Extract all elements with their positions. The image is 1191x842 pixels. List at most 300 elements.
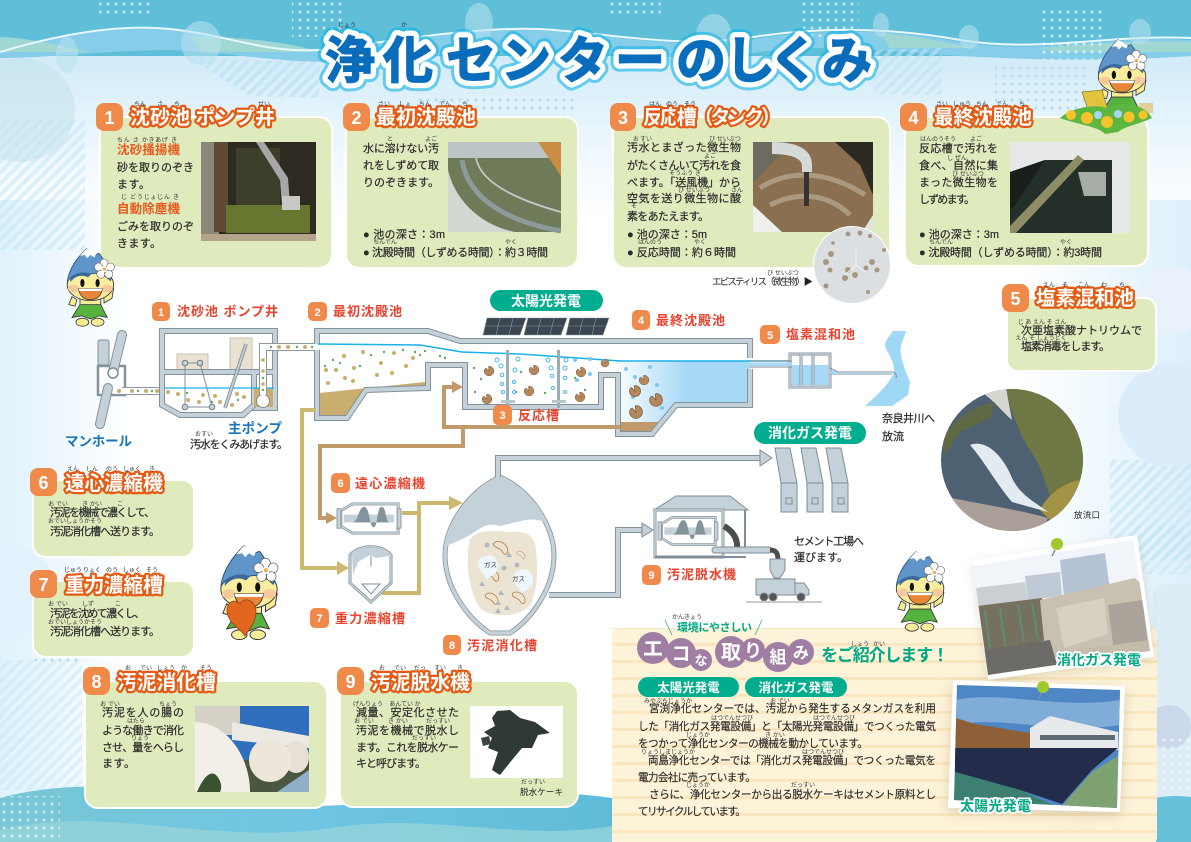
text: digester description: お でい xyxy=(100,701,120,708)
heading: eco circles: り xyxy=(744,641,762,661)
baffles xyxy=(501,350,566,408)
text: eco body copy: さらに、浄化センターから出る脱水ケーキはセメント原料とし xyxy=(649,788,936,801)
gravity thickener xyxy=(350,547,391,602)
caption: cake xyxy=(520,779,563,797)
text: chlorine description: 塩素消毒をします。 xyxy=(1021,339,1110,353)
text: reaction tank description: び せいぶつ xyxy=(709,135,741,143)
heading 2: 最初沈殿池 xyxy=(376,106,476,129)
text: first settling description: やく xyxy=(505,238,517,246)
gas bubble labels: ガス xyxy=(484,560,497,569)
solar label: 太陽光発電 xyxy=(511,293,581,309)
photo: reaction tank xyxy=(753,142,873,232)
mascot: watering flowers xyxy=(1098,40,1147,119)
sediment particles xyxy=(324,349,586,394)
text: eco body copy: き かい xyxy=(765,732,785,739)
heading: introduction text: しょう xyxy=(851,641,869,648)
panel 4: final settling tank xyxy=(900,101,1148,266)
heading 3: 反応槽（タンク） xyxy=(643,106,781,129)
water surface line xyxy=(318,344,790,361)
text: dewatering description: お でい xyxy=(354,718,374,725)
final settling sludge xyxy=(620,422,659,432)
text: final settling description: やく xyxy=(1060,238,1072,246)
panel 9: sludge dewatering: すい xyxy=(434,665,446,672)
text: eco body copy: をつかって浄化センターの機械を動かしています。 xyxy=(638,737,868,750)
label 7: 重力濃縮槽 xyxy=(335,611,405,626)
panel 7: gravity thickener: そう xyxy=(146,567,158,574)
badge 8 xyxy=(83,667,110,695)
heading 9: 汚泥脱水機 xyxy=(371,671,470,694)
panel 3: reaction tank: そう xyxy=(684,101,696,108)
text: grit scraper: 自動除塵機 xyxy=(117,201,180,216)
text: final settling description: はんのうそう xyxy=(920,136,956,143)
chlorine tank xyxy=(750,354,896,387)
text: centrifuge description: おでいしょうかそう xyxy=(48,518,102,525)
text: reaction tank description: そ xyxy=(631,203,637,210)
text: first settling description: ● 沈殿時間（しずめる時間）：約３時間 xyxy=(363,245,548,259)
arrow heads: brown xyxy=(326,381,463,524)
text: final settling description: び せいぶつ xyxy=(952,170,984,178)
panel 2: first settling tank: でん xyxy=(439,101,451,108)
text: reaction tank description: さん xyxy=(731,187,743,194)
text: centrifuge description: 汚泥を機械で濃くして、 xyxy=(50,505,155,519)
text: gravity description: しず xyxy=(82,600,94,608)
text: grit scraper: 砂を取りのぞき xyxy=(117,161,194,174)
panel 6: centrifugal thickener: しゅく xyxy=(123,466,141,473)
caption: solar: 太陽光発電 xyxy=(960,798,1031,814)
text: eco body copy: 電力会社に売っています。 xyxy=(638,771,756,784)
text: grit scraper: きます。 xyxy=(117,237,161,250)
label: main pump: 主ポンプ xyxy=(228,420,282,436)
panel 4: final settling tank: さい xyxy=(936,101,948,108)
text: eco body copy: した「消化ガス発電設備」と「太陽光発電設備」でつくった電気 xyxy=(638,720,936,733)
text: centrifuge description: き かい xyxy=(82,501,102,508)
text: first settling description: 水に溶けない汚 xyxy=(363,142,439,155)
text: centrifuge description xyxy=(48,501,160,538)
label 4: 4 xyxy=(638,315,645,327)
pill: solar power xyxy=(638,677,739,697)
pill: digestion gas power: 消化ガス発電 xyxy=(758,680,834,695)
air bubbles xyxy=(495,357,568,394)
caption: epistylis: エピスティリス（微生物）▶ xyxy=(712,276,813,288)
photo: dewatered cake xyxy=(470,706,563,778)
text: dewatering description: キと呼びます。 xyxy=(356,757,426,770)
text: gravity description: おでいしょうかそう xyxy=(48,619,102,626)
panel: eco initiatives xyxy=(612,614,1157,842)
mascot: left top xyxy=(67,249,114,326)
text: eco body copy: お でい xyxy=(770,698,790,705)
photo: final settling tank xyxy=(1010,142,1130,233)
badge 5 xyxy=(1002,284,1029,312)
panel 4: final settling tank: ちん xyxy=(976,101,988,108)
text: digester description: させ、量をへらし xyxy=(102,741,184,754)
panel 3: reaction tank: はん xyxy=(649,101,661,108)
label: main pump xyxy=(190,420,288,451)
panel 8: sludge digester: か xyxy=(181,665,187,672)
panel 3: reaction tank xyxy=(610,101,890,268)
text: chlorine description: 次亜塩素酸ナトリウムで xyxy=(1021,323,1142,337)
title: じょう xyxy=(338,22,356,29)
label 7: 7 xyxy=(316,613,323,625)
blue droplets xyxy=(573,357,664,410)
badge 4 xyxy=(900,103,927,131)
text: reaction tank description: べます。「送風機」から xyxy=(627,175,741,189)
caption: digestion gas: 消化ガス発電 xyxy=(1057,652,1141,668)
text: final settling description: しずめます。 xyxy=(919,193,975,206)
badge 5: 5 xyxy=(1010,289,1021,309)
label 2: 最初沈殿池 xyxy=(333,304,402,319)
panel 1: grit chamber and pump well: せい xyxy=(258,101,270,108)
subtitle: eco friendly xyxy=(665,614,762,635)
text: digester description: はたら xyxy=(127,718,145,725)
mascot: holding heart xyxy=(221,546,278,640)
pin: gas photo xyxy=(1051,538,1063,556)
panel 8: sludge digester xyxy=(83,665,327,808)
badge 9: 9 xyxy=(345,672,356,692)
label: manhole: マンホール xyxy=(65,434,132,449)
text: eco body copy: じょうか xyxy=(686,732,710,739)
text: centrifuge description: こ xyxy=(117,501,123,508)
heading: eco circles: 取 xyxy=(721,642,741,664)
text: dewatering description: ます。これを脱水ケー xyxy=(356,740,459,754)
panel 7: gravity thickener xyxy=(30,567,194,657)
caption: cake: だっすい xyxy=(521,779,545,786)
text: eco body copy: 宮渕浄化センターでは、汚泥から発生するメタンガスを利用 xyxy=(649,702,936,715)
panel 5: chlorine mixing tank: えん xyxy=(1043,282,1055,289)
text: final settling description: まった微生物を xyxy=(919,175,998,189)
cement factory label xyxy=(794,535,864,564)
pill: digestion gas power xyxy=(745,677,847,697)
panel 9: sludge dewatering: き xyxy=(457,665,463,672)
cement factory label: セメント工場へ xyxy=(794,535,864,548)
label 9: 汚泥脱水機 xyxy=(667,567,736,582)
panel 4: final settling tank: でん xyxy=(996,101,1008,108)
text: gravity description xyxy=(48,600,160,638)
gas generators xyxy=(775,448,848,512)
text: digester description: 汚泥を人の腸の xyxy=(102,706,184,719)
label 5 xyxy=(760,325,855,344)
text: grit scraper: 沈砂掻揚機 xyxy=(117,142,180,157)
final tank water xyxy=(612,361,750,425)
mascot: right xyxy=(896,552,945,631)
text: reaction tank description: よご xyxy=(704,152,716,160)
badge 7: 7 xyxy=(38,575,49,595)
badge 7 xyxy=(30,570,57,598)
photo: first settling tank xyxy=(448,142,561,232)
diagram labels xyxy=(152,302,855,655)
photo: digester tanks xyxy=(195,706,309,792)
text: reaction tank description: 素をあたえます。 xyxy=(627,210,709,223)
first settling sludge xyxy=(319,382,425,416)
text: gravity description: 汚泥を沈めて濃くし、 xyxy=(50,606,145,620)
label 6 xyxy=(331,473,425,493)
badge 1: 1 xyxy=(104,108,115,128)
text: digester description: りょう xyxy=(131,735,149,742)
gas power label xyxy=(754,422,866,444)
dewatering machine xyxy=(654,496,778,560)
text: reaction tank description: そうふう き xyxy=(669,170,701,177)
text: eco body copy: だっすい xyxy=(791,782,815,789)
heading: eco circles xyxy=(637,632,814,672)
text: final settling description: し ぜん xyxy=(947,155,967,162)
text: gravity description: こ xyxy=(115,601,121,608)
text: final settling description: ● 沈殿時間（しずめる時間）：約3時間 xyxy=(919,245,1102,259)
photo: microscope view xyxy=(813,226,890,303)
text: reaction tank description: お xyxy=(633,136,639,143)
text: eco body copy: みやぶちじょうか xyxy=(644,697,692,705)
badge 6: 6 xyxy=(38,473,49,493)
text: digester description: ます。 xyxy=(102,757,135,770)
panel 6: centrifugal thickener: しん xyxy=(86,466,98,473)
inlet pipe xyxy=(116,389,170,393)
label 6: 遠心濃縮機 xyxy=(355,476,425,491)
text: final settling description: ● 池の深さ：3m xyxy=(919,228,999,241)
text: chlorine description: えん そ しょうどく xyxy=(1015,334,1067,342)
heading 8: 汚泥消化槽 xyxy=(117,671,216,694)
text: first settling description: りのぞきます。 xyxy=(363,176,439,189)
label: main pump: おすい xyxy=(195,431,213,438)
text: reaction tank description: やく xyxy=(694,238,706,246)
panel 3: reaction tank: のう xyxy=(666,101,678,108)
heading 6: 遠心濃縮機 xyxy=(65,472,163,495)
text: first settling description: と xyxy=(387,136,393,143)
label 1 xyxy=(152,302,278,321)
heading 5: 塩素混和池 xyxy=(1036,287,1134,310)
heading: introduction text: かい xyxy=(873,641,885,648)
text: eco body copy xyxy=(638,697,936,818)
text: reaction tank description: ● 池の深さ：5m xyxy=(627,228,707,241)
panel 1: grit chamber and pump well xyxy=(96,101,332,268)
panel 7: gravity thickener: しゅく xyxy=(123,567,141,574)
title: か xyxy=(401,22,407,29)
microbes xyxy=(482,359,662,418)
badge 9 xyxy=(337,667,364,695)
solar label xyxy=(490,290,603,311)
label 7 xyxy=(310,608,405,628)
gas bubble labels xyxy=(478,555,533,593)
badge 3: 3 xyxy=(618,108,628,128)
panel 1: grit chamber and pump well: ちん xyxy=(134,101,146,108)
gas power label: 消化ガス発電 xyxy=(768,425,852,441)
heading 7: 重力濃縮槽 xyxy=(65,574,163,597)
text: eco body copy: りょうしまじょうか xyxy=(641,749,695,756)
text: reaction tank description: び せいぶつ xyxy=(678,186,710,194)
river label: 奈良井川へ xyxy=(882,411,935,425)
text: reaction tank description: がたくさんいて汚れを食 xyxy=(627,158,741,172)
text: eco body copy: はつでんせつび xyxy=(802,748,844,756)
label: main pump: 汚水をくみあげます。 xyxy=(190,438,288,451)
photo: grit chamber xyxy=(201,142,316,241)
label 2 xyxy=(308,302,402,321)
lift pipe xyxy=(261,345,316,395)
pin: solar photo xyxy=(1037,681,1049,699)
panel 6: centrifugal thickener: のう xyxy=(106,466,118,473)
text: grit scraper xyxy=(117,136,194,250)
text: final settling description: ちんでん xyxy=(929,239,953,246)
text: eco body copy: はつでんせつび xyxy=(711,714,753,722)
panel 1: grit chamber and pump well: ち xyxy=(174,101,180,108)
text: centrifuge description: 汚泥消化槽へ送ります。 xyxy=(50,524,160,538)
text: first settling description: よご xyxy=(425,135,437,143)
pill: solar power: 太陽光発電 xyxy=(657,680,720,695)
text: chlorine description xyxy=(1015,319,1142,353)
panel 8: sludge digester: そう xyxy=(200,665,212,672)
panel 5: chlorine mixing tank: わ xyxy=(1101,282,1107,289)
heading: eco circles: エ xyxy=(642,638,664,661)
text: dewatering description: げんりょう xyxy=(353,700,383,708)
subtitle: eco friendly: かんきょう xyxy=(672,614,702,621)
label 8 xyxy=(443,635,537,655)
process diagram xyxy=(65,290,935,655)
caption: outlet: 放流口 xyxy=(1074,510,1100,520)
sand pipe xyxy=(302,410,450,593)
text: dewatering description xyxy=(353,700,459,770)
photo: discharge outlet xyxy=(940,388,1090,535)
heading 1: 沈砂池 ポンプ井 xyxy=(130,106,275,129)
photo: digestion gas power xyxy=(970,535,1160,680)
heading: eco circles: な xyxy=(694,653,708,668)
panel 6: centrifugal thickener xyxy=(30,466,194,557)
text: reaction tank description: 汚水とまざった微生物 xyxy=(627,140,741,154)
river label: 放流 xyxy=(882,429,904,443)
text: grit scraper: ます。 xyxy=(117,178,150,191)
text: reaction tank description: 空気を送り微生物に酸 xyxy=(627,191,741,205)
text: first settling description: ちんでん xyxy=(373,239,397,246)
photo: solar power xyxy=(948,680,1125,812)
text: reaction tank description: ● 反応時間：約６時間 xyxy=(627,245,736,259)
brown sludge pipe xyxy=(320,387,620,518)
text: centrifuge description: お でい xyxy=(48,501,68,508)
heading: eco circles: コ xyxy=(671,644,691,665)
badge 2: 2 xyxy=(351,108,362,128)
badge 2 xyxy=(343,103,370,131)
panel 7: gravity thickener: りょく xyxy=(83,567,101,574)
dewatering pipe xyxy=(549,523,653,595)
panel 2: first settling tank: ち xyxy=(462,101,468,108)
panel 7: gravity thickener: のう xyxy=(106,567,118,574)
grit chamber building xyxy=(162,331,275,415)
text: reaction tank description: はんのう xyxy=(638,239,662,246)
panel 6: centrifugal thickener: き xyxy=(149,466,155,473)
panel 5: chlorine mixing tank: こん xyxy=(1078,282,1090,289)
gas bubble labels: ガス xyxy=(512,574,525,583)
text: gravity description: お でい xyxy=(48,601,68,608)
text: reaction tank description: すい xyxy=(640,136,652,143)
text: dewatering description: あんてい か xyxy=(389,701,421,708)
truck xyxy=(746,559,822,602)
label 8: 8 xyxy=(449,640,455,652)
text: eco body copy: じょうか xyxy=(686,782,710,789)
panel 5: chlorine mixing tank xyxy=(1002,282,1156,371)
text: digester description: ちょう xyxy=(159,701,177,708)
panel 9: sludge dewatering: だっ xyxy=(414,665,426,672)
label 4 xyxy=(632,310,725,330)
heading: eco circles: 組 xyxy=(770,648,786,667)
centrifugal thickener xyxy=(337,504,401,533)
text: reaction tank description xyxy=(627,135,743,259)
text: grit scraper: ちん さ かきあげ き xyxy=(117,136,177,144)
panel 9: sludge dewatering: でい xyxy=(394,665,406,672)
text: dewatering description: 減量、安定化させた xyxy=(356,705,459,719)
badge 3 xyxy=(610,103,636,131)
badge 4: 4 xyxy=(908,108,919,128)
label 3: 反応槽 xyxy=(518,408,559,423)
text: final settling description: 食べ、自然に集 xyxy=(919,158,998,172)
flowers and watering can xyxy=(1060,90,1153,134)
subtitle: eco friendly: 環境にやさしい xyxy=(677,621,752,634)
text: digester description xyxy=(100,701,184,770)
label 5: 塩素混和池 xyxy=(786,327,855,342)
panel 4: final settling tank: しゅう xyxy=(953,101,971,108)
badge 1 xyxy=(96,103,123,131)
panel 5: chlorine mixing tank: そ xyxy=(1062,282,1068,289)
label 3: 3 xyxy=(499,410,506,422)
gas pipe to generators xyxy=(498,450,772,477)
caption: epistylis: び せいぶつ xyxy=(767,269,799,277)
panel 2: first settling tank: ちん xyxy=(419,101,431,108)
caption: epistylis xyxy=(712,269,813,288)
panel 9: sludge dewatering xyxy=(337,665,578,807)
panel 8: sludge digester: しょう xyxy=(157,665,175,672)
text: eco body copy: 両島浄化センターでは「消化ガス発電設備」でつくった電気を xyxy=(648,754,936,767)
label 1: 1 xyxy=(158,307,164,319)
label 9: 9 xyxy=(648,570,655,582)
text: gravity description: 汚泥消化槽へ送ります。 xyxy=(50,624,160,638)
heart xyxy=(227,600,256,636)
text: first settling description xyxy=(363,135,548,259)
text: eco body copy: てリサイクルしています。 xyxy=(638,806,746,818)
manhole xyxy=(98,335,125,424)
text: first settling description: ● 池の深さ：3m xyxy=(363,228,445,241)
title: 浄化センターのしくみ xyxy=(325,33,872,89)
panel 1: grit chamber and pump well: さ xyxy=(157,101,163,108)
label 1: 沈砂池 ポンプ井 xyxy=(177,304,278,319)
label 5: 5 xyxy=(767,330,773,342)
river xyxy=(865,331,910,406)
panel 2: first settling tank: さい xyxy=(378,101,390,108)
text: eco body copy: はつでんせつび xyxy=(813,714,855,722)
label 8: 汚泥消化槽 xyxy=(467,638,537,653)
panel 6: centrifugal thickener: えん xyxy=(67,466,79,473)
solar panels xyxy=(483,318,609,335)
title: 浄化センターのしくみ xyxy=(325,33,872,89)
panel 8: sludge digester: でい xyxy=(140,665,152,672)
panel 2: first settling tank: しょ xyxy=(399,101,411,108)
panel 5: chlorine mixing tank: ち xyxy=(1119,282,1125,289)
badge 6 xyxy=(30,468,57,496)
label 4: 最終沈殿池 xyxy=(656,313,725,328)
label 6: 6 xyxy=(337,478,344,490)
text: final settling description: よご xyxy=(970,135,982,143)
label 9 xyxy=(642,565,736,585)
panel 7: gravity thickener: じゅう xyxy=(64,567,82,574)
text: dewatering description: だっすい xyxy=(412,735,436,742)
text: dewatering description: き かい xyxy=(388,718,408,725)
heading: introduction text: をご紹介します！ xyxy=(821,645,949,665)
text: chlorine description: じ あ えん そ さん xyxy=(1018,319,1066,326)
arrow heads: sand xyxy=(337,496,463,575)
text: digester description: ような働きで消化 xyxy=(102,723,184,737)
text: dewatering description: 汚泥を機械で脱水し xyxy=(356,723,459,737)
panel 2: first settling tank xyxy=(343,101,578,268)
panel 4: final settling tank: ち xyxy=(1019,101,1025,108)
badge 8: 8 xyxy=(91,672,102,692)
river label xyxy=(882,411,935,443)
text: dewatering description: だっすい xyxy=(426,718,450,725)
caption: cake: 脱水ケーキ xyxy=(520,787,563,797)
panel 8: sludge digester: お xyxy=(125,665,131,672)
title: 浄化センターのしくみ xyxy=(325,33,872,89)
text: grit scraper: ごみを取りのぞ xyxy=(117,219,194,233)
